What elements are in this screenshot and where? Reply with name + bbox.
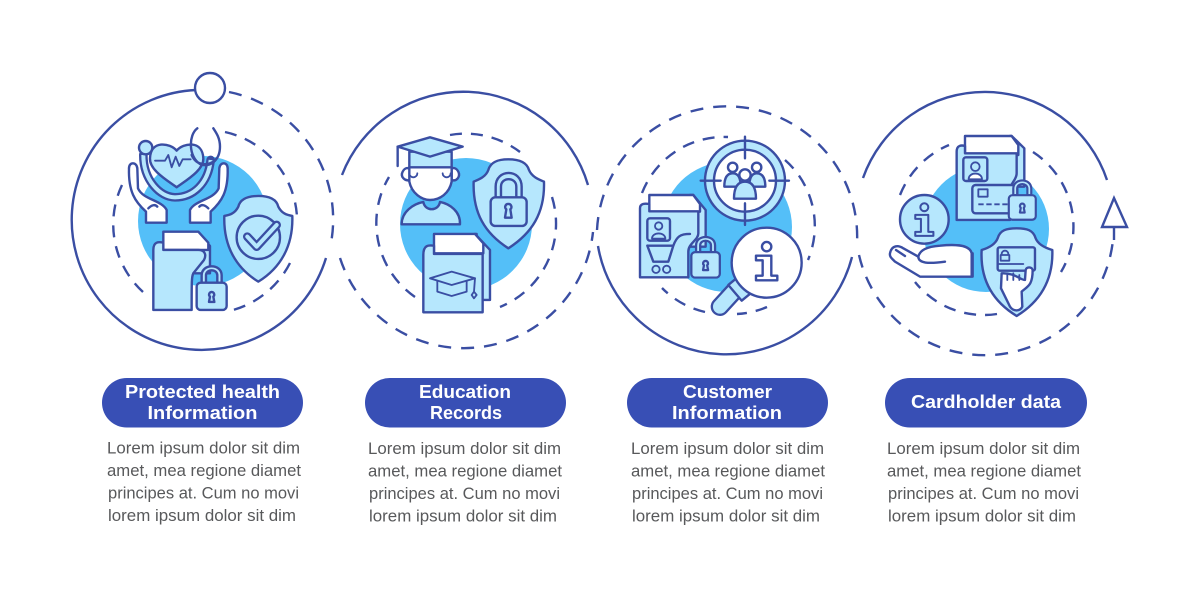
label pill: Protected health: [125, 381, 280, 402]
body text: principes at. Cum no movi: [632, 485, 823, 503]
label pill: [365, 378, 566, 428]
body text: amet, mea regione diamet: [107, 462, 301, 480]
icon: target audience, folder with cart, magnifier with info: [640, 137, 802, 307]
icon: graduate, shield with lock, folder with cap: [398, 137, 544, 312]
body text: principes at. Cum no movi: [108, 484, 299, 502]
blue disc: [662, 162, 792, 292]
label pill: Cardholder data: [911, 391, 1062, 412]
outer ring: [597, 106, 857, 354]
label pill: Information: [148, 402, 258, 423]
inner dashed ring: [113, 132, 297, 310]
panel: Protected health Information: [72, 73, 333, 525]
body text: [631, 440, 825, 526]
panel: Cardholder data: [859, 92, 1127, 526]
blue disc: [923, 166, 1049, 292]
blue disc: [138, 156, 268, 286]
blue disc: [400, 158, 532, 290]
body text: principes at. Cum no movi: [369, 485, 560, 503]
icon: folder with card, info hand, shield with card: [890, 136, 1052, 316]
label pill: Customer: [683, 381, 772, 402]
body text: lorem ipsum dolor sit dim: [369, 508, 557, 526]
body text: [368, 440, 562, 526]
body text: amet, mea regione diamet: [368, 462, 562, 480]
body text: lorem ipsum dolor sit dim: [108, 507, 296, 525]
label pill: [102, 378, 303, 428]
body text: amet, mea regione diamet: [631, 462, 825, 480]
panel: Education Records: [340, 92, 593, 526]
icon: hands, heart, stethoscope, shield, folder and lock: [129, 128, 292, 310]
body text: Lorem ipsum dolor sit dim: [887, 440, 1080, 458]
label pill: Information: [672, 402, 782, 423]
outer ring: [340, 92, 593, 348]
label pill: Records: [430, 402, 502, 423]
inner dashed ring: [376, 134, 556, 307]
body text: [887, 440, 1081, 526]
inner dashed ring: [642, 137, 815, 314]
outer ring: [859, 92, 1113, 355]
body text: lorem ipsum dolor sit dim: [632, 508, 820, 526]
label pill: [885, 378, 1087, 428]
label pill: Education: [419, 381, 511, 402]
body text: principes at. Cum no movi: [888, 485, 1079, 503]
label pill: [627, 378, 828, 428]
outer ring with start node: [72, 73, 333, 350]
body text: [107, 440, 301, 525]
body text: Lorem ipsum dolor sit dim: [107, 440, 300, 458]
body text: amet, mea regione diamet: [887, 462, 1081, 480]
arrow head: [1102, 198, 1127, 240]
body text: Lorem ipsum dolor sit dim: [368, 440, 561, 458]
body text: Lorem ipsum dolor sit dim: [631, 440, 824, 458]
panel: Customer Information: [597, 106, 857, 525]
body text: lorem ipsum dolor sit dim: [888, 508, 1076, 526]
inner dashed ring: [900, 145, 1073, 315]
